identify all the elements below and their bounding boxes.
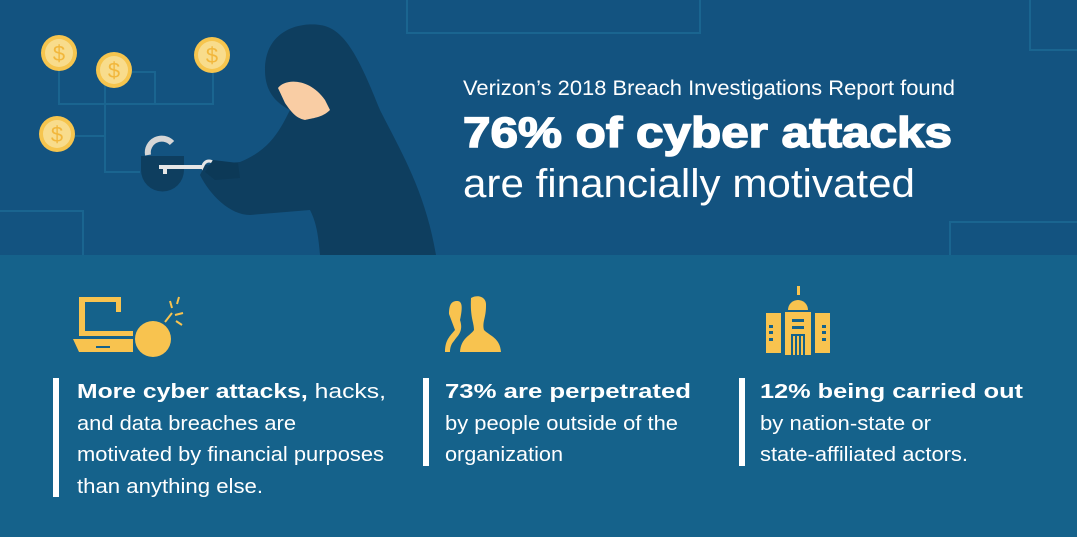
text: column 3 bbox=[760, 381, 1023, 466]
icon: hooded hacker bbox=[200, 24, 436, 255]
text: column 1: than anything else. bbox=[77, 476, 263, 498]
text: column 2 bbox=[445, 381, 691, 466]
panel: top hero bbox=[0, 0, 1077, 255]
text: column 2: 73% are perpetrated bbox=[445, 381, 691, 403]
icon: coins bbox=[39, 35, 230, 152]
panel: column 2 bbox=[423, 296, 691, 466]
heading: report intro: Verizon’s 2018 Breach Investigations Report found bbox=[463, 77, 955, 100]
text: column 3: state-affiliated actors. bbox=[760, 444, 968, 466]
icon: coins: $ bbox=[206, 43, 218, 68]
text: column 3: 12% being carried out bbox=[760, 381, 1023, 403]
panel: column 3 bbox=[739, 286, 1023, 466]
icon: laptop with bomb bbox=[73, 297, 183, 357]
text: column 2: organization bbox=[445, 444, 563, 466]
icon: people bbox=[445, 296, 501, 352]
text: column 1: and data breaches are bbox=[77, 413, 296, 435]
text: column 1: motivated by financial purposes bbox=[77, 444, 384, 466]
panel: column 1 bbox=[53, 297, 386, 498]
icon: padlock and key bbox=[141, 139, 215, 192]
heading: motivation: are financially motivated bbox=[463, 162, 915, 206]
icon: coins: $ bbox=[108, 58, 120, 83]
text: column 1 bbox=[77, 381, 386, 498]
text: column 1: More cyber attacks, hacks, bbox=[77, 381, 386, 403]
heading: 76% stat: 76% of cyber attacks bbox=[463, 109, 952, 157]
icon: coins: $ bbox=[51, 122, 63, 147]
icon: coins: $ bbox=[53, 41, 65, 66]
text: column 2: by people outside of the bbox=[445, 413, 678, 435]
text: column 3: by nation-state or bbox=[760, 413, 931, 435]
icon: government building bbox=[766, 286, 830, 355]
